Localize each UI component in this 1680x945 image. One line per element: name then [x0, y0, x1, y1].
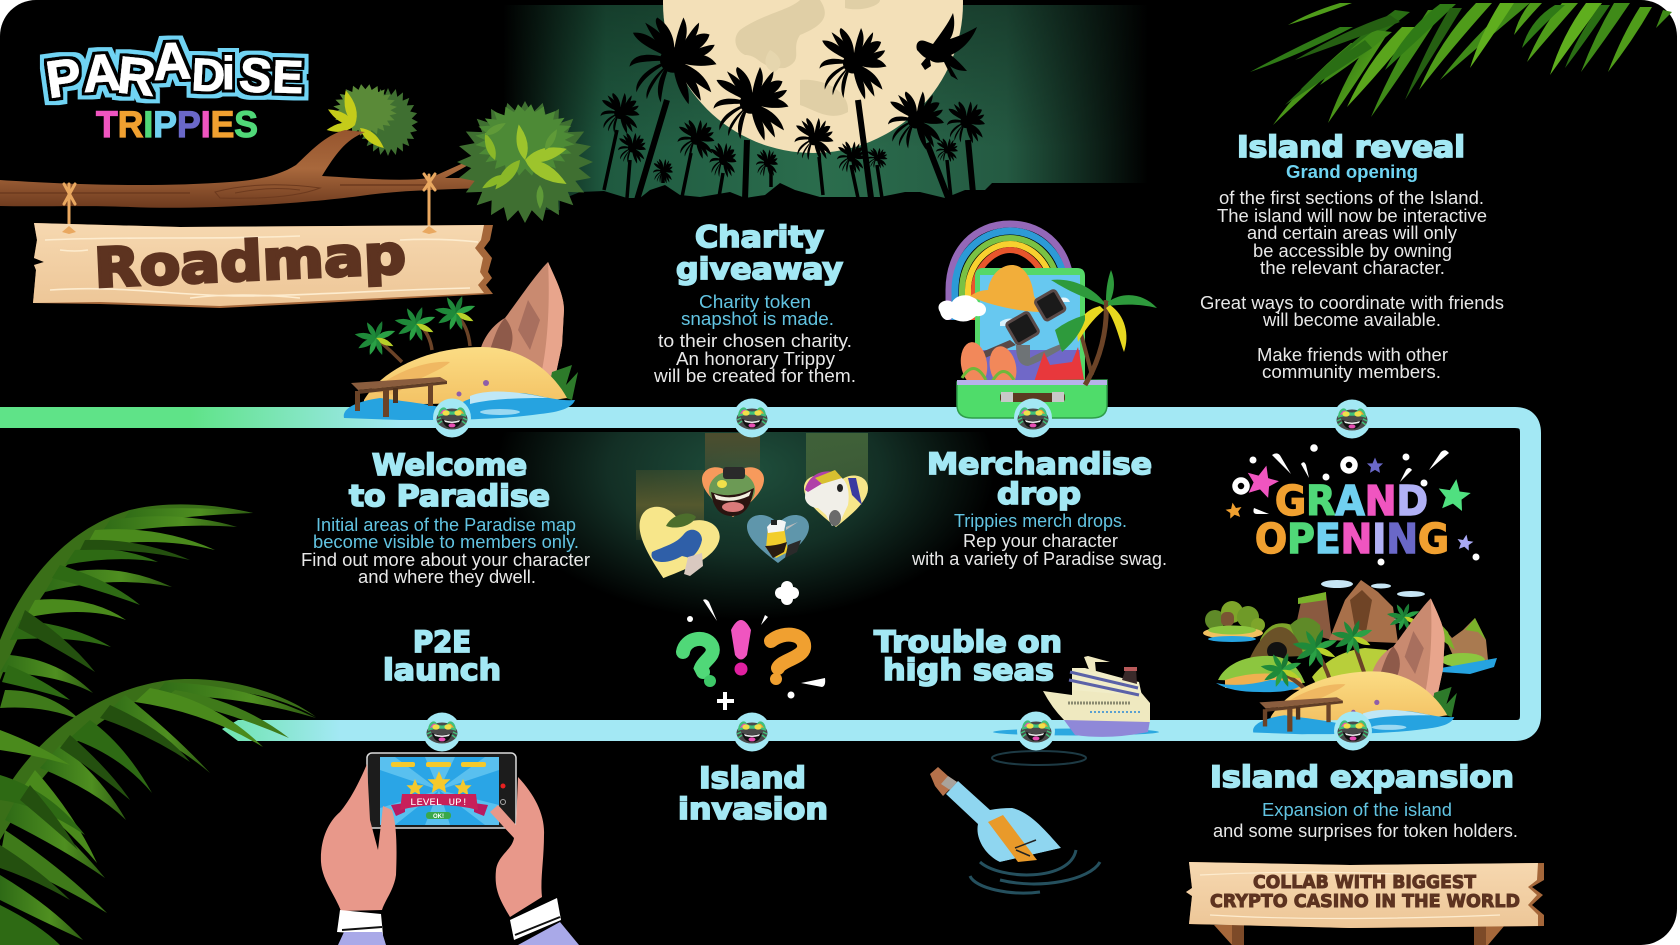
- sign legs: [1214, 925, 1505, 945]
- node: p2e: [423, 712, 461, 752]
- pegasus silhouette: [916, 13, 977, 80]
- roadmap hanging sign: [33, 174, 493, 308]
- text: island reveal: the relevant character.: [1260, 258, 1445, 278]
- foreground isle: [1253, 598, 1457, 734]
- text: island reveal: Grand opening: [1286, 162, 1418, 182]
- central green: [1312, 648, 1387, 690]
- moon: [663, 0, 963, 153]
- tablet with hands: LEVEL UP!: [410, 798, 468, 809]
- text: welcome to paradise: Initial areas of the Paradise map: [316, 515, 576, 535]
- logo word: Paradise: D: [190, 48, 226, 102]
- heart: horse: [804, 470, 868, 527]
- text: charity giveaway: snapshot is made.: [681, 309, 834, 329]
- ground silhouette: [560, 183, 1150, 212]
- text: merchandise drop: drop: [997, 477, 1081, 511]
- text: island reveal: will become available.: [1262, 310, 1441, 330]
- confetti: [1235, 444, 1480, 566]
- green hill left: [1218, 656, 1305, 683]
- text: island reveal: The island will now be interactive: [1217, 206, 1487, 226]
- logo word: Paradise: R: [115, 46, 158, 108]
- ropes: [64, 174, 435, 228]
- rainbow: [949, 224, 1071, 320]
- text: island reveal: Make friends with other: [1257, 345, 1448, 365]
- text: island reveal: and certain areas will only: [1247, 223, 1457, 243]
- rope knots: [62, 226, 437, 234]
- cork: [930, 767, 957, 796]
- cruise ship: [993, 656, 1159, 737]
- text: merchandise drop: with a variety of Paradise swag.: [911, 549, 1167, 569]
- big island illustration: [1203, 580, 1497, 734]
- text: p2e launch: P2E: [413, 625, 471, 659]
- logo word: Paradise: A: [81, 43, 122, 104]
- text: welcome to paradise: and where they dwell.: [358, 567, 536, 587]
- pipe: [1016, 342, 1067, 366]
- grand word: GRAND: [1275, 477, 1428, 525]
- right cuff: [510, 898, 561, 940]
- logo word: Paradise: A: [152, 32, 192, 92]
- hat: [970, 265, 1043, 312]
- ok button: [426, 812, 451, 819]
- timeline track: [0, 407, 1530, 741]
- tree branch with foliage: [0, 81, 593, 223]
- brown mountain: [1329, 580, 1398, 643]
- palm frond top right: [1250, 3, 1672, 125]
- node: merchandise: [1014, 398, 1052, 438]
- text: charity giveaway: An honorary Trippy: [676, 349, 835, 369]
- orange question mark: [771, 635, 804, 668]
- logo word: Paradise: P: [43, 48, 85, 110]
- text: island reveal: of the first sections of the Island.: [1219, 188, 1484, 208]
- right small mountains: [1437, 618, 1497, 674]
- text: charity giveaway: to their chosen charity.: [658, 331, 852, 351]
- text: charity giveaway: [653, 220, 856, 386]
- left hand: [321, 764, 397, 911]
- text: island expansion: and some surprises for token holders.: [1213, 821, 1518, 841]
- text: island invasion: Island: [699, 761, 806, 795]
- opening word: OPENING: [1255, 515, 1449, 563]
- heart: frog: [702, 467, 764, 517]
- suitcase base: [957, 380, 1107, 418]
- text: charity giveaway: will be created for them.: [653, 366, 856, 386]
- tablet with hands: OK!: [433, 814, 444, 820]
- text: trouble on high seas: Trouble on: [874, 625, 1062, 659]
- node: charity: [733, 398, 771, 438]
- text: charity giveaway: Charity: [695, 220, 824, 254]
- wood plank: [33, 223, 493, 308]
- heart: crocodile: [624, 502, 724, 590]
- sparks: [687, 581, 825, 710]
- pink exclamation: [731, 620, 751, 660]
- suitcase illustration: [939, 224, 1157, 418]
- red top: [1033, 347, 1085, 385]
- text: island reveal: Island reveal: [1237, 130, 1465, 164]
- green bushes: [1260, 623, 1318, 660]
- roadmap title: Roadmap: [93, 223, 407, 300]
- suitcase palm: [1051, 270, 1157, 385]
- logo word: Paradise: [43, 32, 304, 110]
- status bars: [391, 762, 486, 767]
- bottle glass: [946, 781, 1061, 862]
- back clouds: [1306, 580, 1425, 624]
- cloud: [939, 295, 986, 322]
- left cuff: [337, 910, 383, 935]
- plank: [1186, 862, 1544, 928]
- text: welcome to paradise: [301, 448, 590, 587]
- text: charity giveaway: giveaway: [676, 252, 843, 286]
- scroll: [988, 815, 1037, 862]
- text: island invasion: [678, 761, 828, 826]
- text: island reveal: [1200, 130, 1504, 382]
- text: welcome to paradise: to Paradise: [349, 479, 550, 513]
- timeline nodes: [423, 398, 1372, 752]
- text: island expansion: [1210, 760, 1518, 841]
- node: island expansion: [1334, 712, 1372, 750]
- text: welcome to paradise: Find out more about your character: [301, 550, 590, 570]
- grand opening title with confetti: [1225, 444, 1480, 566]
- left islet: [1203, 601, 1265, 642]
- palm fronds bottom left: [0, 504, 316, 945]
- palms: [1260, 603, 1420, 688]
- small island illustration: [344, 262, 578, 420]
- tablet body: [367, 753, 516, 828]
- logo word: Paradise: E: [272, 50, 304, 103]
- message bottle: [930, 751, 1100, 893]
- text: charity giveaway: Charity token: [699, 292, 811, 312]
- logo word: Paradise: i: [222, 47, 235, 99]
- question and exclamation marks: [683, 581, 825, 710]
- collab wooden sign: CRYPTO CASINO IN THE WORLD: [1210, 891, 1520, 912]
- text: island invasion: invasion: [678, 792, 828, 826]
- flip flops: [958, 340, 990, 388]
- heart: pirate: [747, 515, 809, 563]
- ribbon: [391, 803, 488, 816]
- text: merchandise drop: Rep your character: [963, 531, 1118, 551]
- palm silhouettes: [600, 17, 985, 200]
- green question mark: [683, 639, 713, 672]
- text: island expansion: Expansion of the island: [1262, 800, 1452, 820]
- logo word: Paradise: S: [237, 48, 274, 104]
- logo word: Trippies: TRIPPIES: [96, 104, 258, 145]
- node: island invasion: [733, 712, 771, 752]
- island palms: [354, 295, 476, 362]
- collab wooden sign: [1186, 862, 1544, 945]
- text: welcome to paradise: Welcome: [372, 448, 527, 482]
- node: island reveal: [1333, 400, 1371, 438]
- text: trouble on high seas: [874, 625, 1062, 687]
- node: welcome: [433, 398, 471, 438]
- text: p2e launch: [383, 625, 501, 687]
- tablet screen: [380, 757, 499, 825]
- text: merchandise drop: [911, 447, 1167, 569]
- night sky with moon and palm silhouettes: [503, 0, 1150, 212]
- text: merchandise drop: Merchandise: [927, 447, 1152, 481]
- tablet with hands: [321, 753, 579, 945]
- right hand: [490, 777, 544, 917]
- text: island expansion: Island expansion: [1210, 760, 1514, 794]
- trippy character hearts: [624, 467, 868, 590]
- handle: [1000, 393, 1065, 402]
- sunglasses: [1006, 290, 1066, 345]
- text: merchandise drop: Trippies merch drops.: [954, 511, 1127, 531]
- cave: [1250, 627, 1304, 658]
- node: trouble on high seas: [1017, 712, 1055, 750]
- text: welcome to paradise: become visible to members only.: [313, 532, 579, 552]
- logo: [43, 32, 304, 145]
- sign text: COLLAB WITH BIGGEST: [1253, 872, 1477, 893]
- stars: [428, 771, 450, 793]
- text: island reveal: community members.: [1262, 362, 1441, 382]
- text: trouble on high seas: high seas: [883, 653, 1054, 687]
- text: island reveal: Great ways to coordinate with friends: [1200, 293, 1504, 313]
- text: p2e launch: launch: [383, 653, 501, 687]
- lower green glow with character beams: [500, 432, 1000, 732]
- bottle ripples: [970, 850, 1100, 893]
- red cliff: [1295, 593, 1332, 640]
- text: island reveal: be accessible by owning: [1253, 241, 1452, 261]
